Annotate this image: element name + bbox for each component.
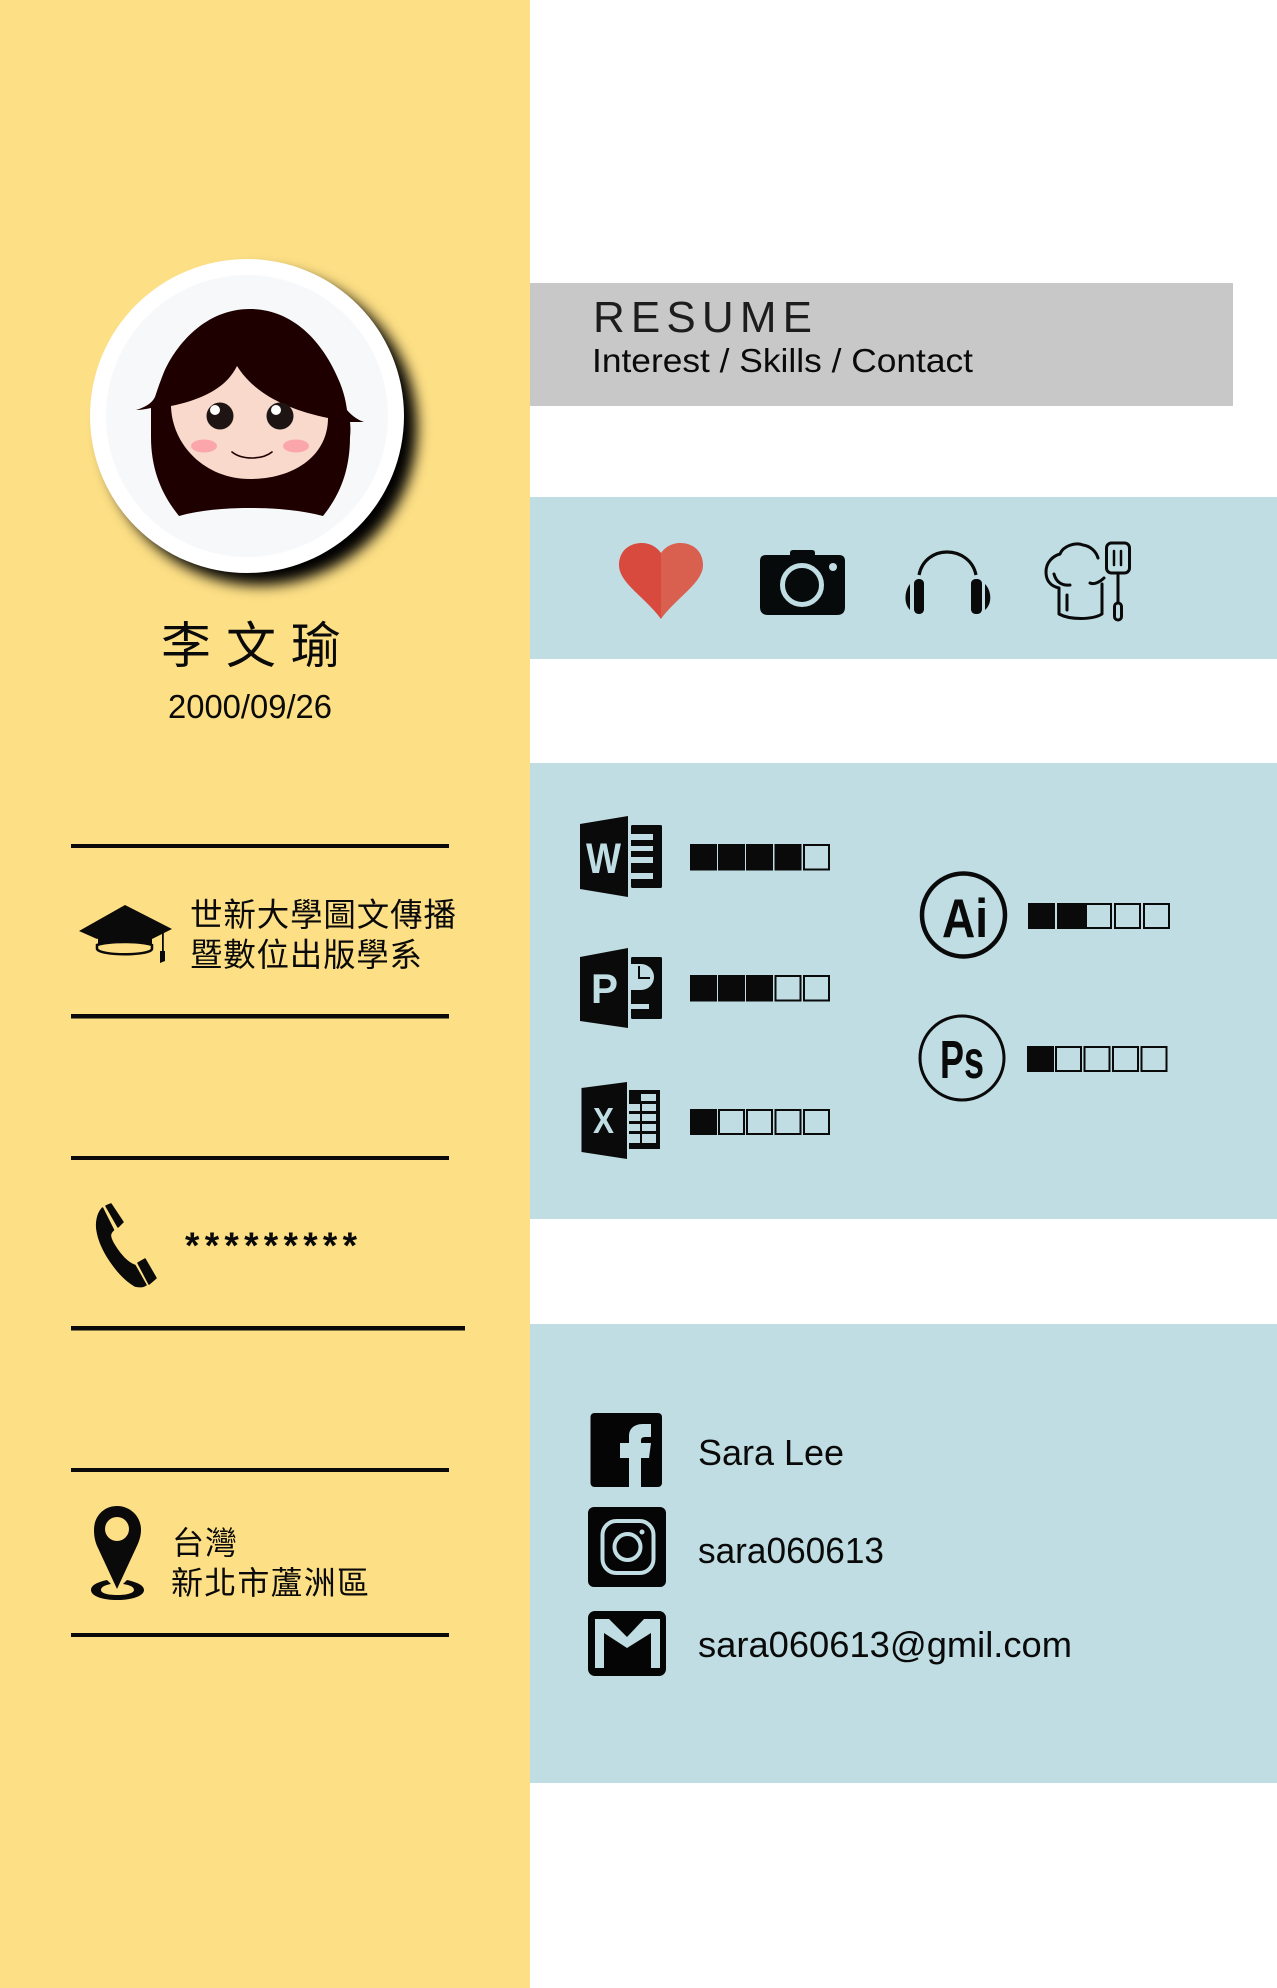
icon: PowerPoint [580, 948, 662, 1028]
contact band [530, 1324, 1277, 1783]
address text [171, 1525, 369, 1601]
panel: yellow sidebar [0, 0, 530, 1988]
rule top [71, 1468, 449, 1472]
text: email address: sara060613@gmil.com [698, 1624, 1072, 1665]
icon: mail [588, 1611, 666, 1676]
rule bottom [71, 1326, 465, 1330]
icon: headphones [905, 552, 990, 614]
panel: contact [530, 1324, 1277, 1783]
birth date: 2000/09/26 [168, 688, 332, 725]
address text: 台灣 [172, 1525, 237, 1561]
right eye [266, 402, 294, 430]
panel: resume header [530, 283, 1233, 406]
panel: interests [530, 497, 1277, 659]
subheading: Interest / Skills / Contact [592, 342, 973, 379]
icon: location pin [91, 1506, 144, 1600]
rule bottom [71, 1633, 449, 1637]
icon: graduation cap [79, 905, 172, 963]
rule top [71, 1156, 449, 1160]
icon: Photoshop [920, 1016, 1004, 1100]
education text: 暨數位出版學系 [190, 937, 422, 973]
rating: Word 4 of 5 [691, 845, 829, 870]
icon: Facebook [590, 1413, 662, 1487]
avatar inner disc [106, 275, 388, 557]
skills band [530, 763, 1277, 1219]
rating: Illustrator 2 of 5 [1029, 904, 1169, 928]
face [171, 366, 328, 479]
avatar white ring [90, 259, 404, 573]
avatar shadow [103, 271, 417, 585]
icon: Excel [582, 1082, 660, 1159]
avatar portrait [90, 259, 417, 585]
icon: Illustrator: Ai [942, 887, 988, 949]
icon: Excel: X [593, 1100, 614, 1141]
icon: chef hat and spatula [1046, 543, 1130, 620]
hair [136, 309, 364, 516]
icon: Word [580, 816, 662, 897]
header bar [530, 283, 1233, 406]
rating: Photoshop 1 of 5 [1028, 1047, 1166, 1071]
icon: heart [619, 543, 703, 619]
interests band [530, 497, 1277, 659]
text: Instagram handle: sara060613 [698, 1530, 884, 1571]
rating: PowerPoint 3 of 5 [691, 976, 829, 1000]
heading: RESUME: RESUME [593, 293, 812, 342]
right cheek [283, 440, 309, 452]
rule top [71, 844, 449, 848]
mouth [232, 452, 272, 458]
education block [71, 844, 456, 1018]
name: 李文瑜 [161, 618, 341, 674]
icon: Photoshop: Ps [940, 1030, 984, 1090]
left cheek [191, 440, 217, 452]
icon: Illustrator [922, 874, 1005, 956]
icon: camera [760, 550, 845, 615]
phone block [71, 1156, 465, 1330]
icon: Word: W [586, 835, 621, 883]
icon: phone handset [97, 1204, 156, 1287]
address text: 新北市蘆洲區 [171, 1565, 369, 1601]
panel: skills [530, 763, 1277, 1219]
education text [190, 897, 456, 973]
rule bottom [71, 1014, 449, 1018]
icon: Instagram [588, 1507, 666, 1587]
text: Facebook name: Sara Lee [698, 1432, 844, 1473]
icon: PowerPoint: P [591, 965, 618, 1012]
rating: Excel 1 of 5 [691, 1110, 829, 1134]
address block [71, 1468, 449, 1637]
phone number masked: ********* [185, 1225, 362, 1266]
left eye [206, 402, 234, 430]
education text: 世新大學圖文傳播 [190, 897, 456, 933]
